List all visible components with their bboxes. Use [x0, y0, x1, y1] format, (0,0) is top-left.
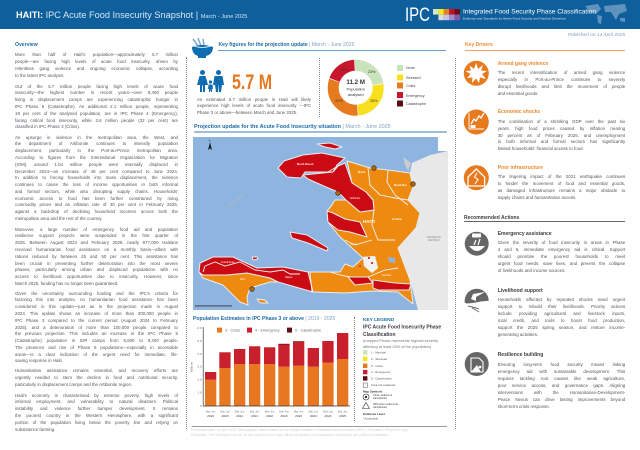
heading: key figures: Key figures for the projection update | March - June 2025	[218, 42, 354, 48]
map: Haiti IPC phase classification: Nord-Ouest	[297, 162, 314, 166]
bar chart: population in IPC Phase 3 or above: 3 - Crisis	[225, 329, 240, 333]
text block: overview: 2025), and a deterioration of more than 100,000 people compared to	[15, 324, 178, 330]
text block: overview: and formal sectors, while also disrupting supply chains. Households'	[15, 189, 178, 194]
bar chart: population in IPC Phase 3 or above: Mar Jun	[323, 410, 333, 414]
driver: poor infrastructure: as damaged infrastructure remains a major obstacle to	[498, 188, 625, 193]
published date: Published on 14 April 2025	[568, 33, 625, 38]
text block: overview: 19 per cent of the analysed population, are in IPC Phase 4 (Emergency),	[15, 111, 178, 116]
text block: overview: insecurity—the highest number in recent years—over 8,400 people	[15, 90, 178, 95]
action: resilience building: emergency aid with sustainable development. This	[498, 369, 625, 374]
text block: overview: relentless gang violence and ongoing economic collapse, according	[15, 66, 178, 71]
footer note	[191, 428, 408, 437]
text block: overview: IPC Phase 5 (Catastrophe). An additional 2.1 million people, representing	[15, 104, 178, 109]
text block: overview: phases, particularly among urban and displaced populations with no	[15, 267, 178, 272]
key legend panel: 3 - Crisis	[371, 364, 383, 368]
key legend panel: classification	[373, 406, 388, 409]
heading: recommended actions: Recommended Actions	[464, 215, 519, 221]
text block: overview: classified in IPC Phase 3 (Crisis).	[15, 124, 80, 129]
bar chart: population in IPC Phase 3 or above: 1.0	[197, 390, 202, 394]
action: livelihood support: include providing agricultural and livestock inputs,	[498, 311, 625, 316]
action: resilience building: poor service access, and governance gaps. Aligning	[498, 383, 625, 388]
action: resilience building: Resilience building	[498, 352, 543, 358]
text block: overview: portion of the population living below the poverty line and relying on	[15, 420, 178, 425]
map: Haiti IPC phase classification: Centre	[392, 217, 402, 221]
map: Haiti IPC phase classification: Grand'Anse	[221, 260, 235, 264]
text block: key figure description: experience high levels of acute food insecurity —IPC	[197, 103, 311, 108]
bar chart: population in IPC Phase 3 or above: 2023	[295, 414, 302, 418]
action: resilience building	[498, 352, 626, 409]
action: emergency assistance: 4 and 5, immediate emergency aid is critical. Support	[498, 247, 625, 252]
driver: armed gang violence: The recent intensification of armed gang violence	[498, 70, 625, 75]
action: livelihood support: support the 2025 spring season, and restore income-	[498, 325, 625, 330]
text block: overview: Haiti's economy is characterised by extreme poverty, high levels of	[15, 393, 178, 398]
action: resilience building: Peace Nexus can drive lasting improvements beyond	[498, 397, 625, 402]
text block: overview: been crucial in preventing further deterioration into the most severe	[15, 260, 178, 266]
bar chart: population in IPC Phase 3 or above: 2024	[325, 414, 332, 418]
text block: overview: resilience support projects were suspended in the first quarter of	[15, 233, 178, 238]
legend: donut phases: Crisis	[406, 84, 415, 88]
driver: economic shocks	[498, 109, 626, 151]
icon: family	[197, 70, 224, 92]
icon: bowl of grain	[192, 38, 213, 58]
IPC logo: Integrated Food Security Phase Classification	[463, 9, 596, 15]
text block: overview: received humanitarian food assistance on a monthly basis—albeit with	[15, 247, 178, 252]
key legend panel: IPC Acute Food Insecurity Phase	[363, 324, 441, 330]
action: emergency assistance: of livelihoods and income sources.	[498, 268, 566, 273]
text block: overview: (Catastrophe) population in IDP camps from 5,600 to 8,400 people.	[15, 338, 178, 343]
driver: armed gang violence: Armed gang violence	[498, 61, 548, 67]
legend: donut phases	[397, 65, 426, 106]
text block: overview: 2024. This update shows an increase of more than 300,000 people in	[15, 311, 178, 316]
bar chart: population in IPC Phase 3 or above: 0	[200, 404, 202, 408]
donut chart: population analysed: 23%	[368, 70, 376, 74]
action: resilience building: requires tackling root causes like weak agriculture,	[498, 376, 625, 381]
text block: overview: facing critical food insecurity, while 3.6 million people (32 per cent) are	[15, 118, 178, 122]
donut chart: population analysed: 11.2 M	[346, 79, 365, 86]
action: resilience building: short-term crisis response.	[498, 404, 550, 409]
icon: poor infrastructure	[464, 165, 489, 190]
key legend panel: 1 - Minimal	[371, 350, 386, 354]
text block: overview: people—are facing high levels of acute food insecurity, driven by	[15, 59, 178, 64]
heading: projection map: Projection update for the Acute Food Insecurity situation | March - June 2025	[194, 124, 391, 130]
footer note: Disclaimer: The information shown on this map does not imply official recognition or endorsement of physical and political boundaries.	[191, 433, 389, 437]
bar chart: population in IPC Phase 3 or above: 2025	[339, 414, 346, 418]
map: Haiti IPC phase classification: Ouest	[350, 242, 357, 246]
bar chart: population in IPC Phase 3 or above: Mar Jun	[279, 410, 289, 414]
bar chart: population in IPC Phase 3 or above: 4 - Emergency	[255, 329, 280, 333]
text block: overview: displacement, particularly in the Port-au-Prince metropolitan area.	[15, 148, 178, 153]
bar chart: population in IPC Phase 3 or above: Mar Jun	[309, 410, 319, 414]
bar chart: population in IPC Phase 3 or above: Mar Jun	[338, 410, 348, 414]
map: Haiti IPC phase classification: N	[209, 138, 211, 142]
text block: overview	[15, 52, 178, 432]
key legend panel: Area not analysed	[371, 383, 396, 387]
action: emergency assistance	[498, 231, 626, 273]
key legend panel: Map Symbols	[363, 390, 383, 394]
text block: overview: the department of Artibonite continues to intensify population	[15, 141, 178, 146]
map: Haiti IPC phase classification: REPUBLIC	[428, 239, 440, 242]
bar chart: population in IPC Phase 3 or above	[190, 326, 350, 418]
icon: livelihood support	[464, 288, 489, 312]
IPC logo: IPC	[405, 4, 430, 26]
text block: overview: to the latest IPC analysis.	[15, 73, 65, 78]
legend: donut phases: Catastrophe	[406, 102, 426, 106]
action: livelihood support: Households affected by repeated shocks need urgent	[498, 297, 625, 302]
text block: overview: According to figures from the International Organization for Migration	[15, 155, 178, 160]
donut chart: population analysed: analysed	[348, 92, 363, 97]
bar chart: population in IPC Phase 3 or above: Mar Jun	[220, 410, 230, 414]
key legend panel: Urban settlement	[373, 394, 392, 397]
text block: key figure description: An estimated 5.7 million people in Haiti will likely	[197, 97, 311, 102]
text block: overview: March 2025, funding has no longer been guaranteed.	[15, 281, 119, 286]
footer note: Publication date: 14 April 2025. Demographic data is based on the Haitian Institute of Statistics and Informatics (IHSI). | Feedback: IPC@FAO.org |	[191, 428, 408, 432]
text block: overview: More than half of Haiti's population—approximately 5.7 million	[15, 52, 178, 57]
driver: economic shocks: years, high food prices caused by inflation nearing	[498, 126, 625, 131]
driver: poor infrastructure: Poor infrastructure	[498, 165, 543, 171]
action: resilience building: interventions with the Humanitarian-Development-	[498, 390, 625, 395]
text block: overview: living in displacement camps are experiencing catastrophic hunger in	[15, 97, 178, 102]
map: Haiti IPC phase classification: Sud	[240, 277, 245, 281]
text block: overview: Given the uncertainty surrounding funding and the IPC's criteria for	[15, 291, 178, 296]
key legend panel: 4 - Emergency	[371, 370, 391, 374]
legend: donut phases: Emergency	[406, 94, 425, 98]
action: livelihood support: support to rebuild their livelihoods. Priority actions	[498, 304, 625, 309]
text block: overview: rations reduced by between 25 and 50 per cent. This assistance has	[15, 254, 178, 259]
action: emergency assistance: Given the severity of food insecurity in areas in Phase	[498, 240, 625, 245]
bar chart: population in IPC Phase 3 or above: Mar Jun	[206, 410, 216, 414]
action: livelihood support	[498, 288, 626, 337]
bar chart: population in IPC Phase 3 or above: 5.0	[197, 339, 202, 343]
bar chart: population in IPC Phase 3 or above: 2022	[266, 414, 273, 418]
text block: overview: IPC Phase 3 compared to the current period (August 2024 to February	[15, 318, 178, 323]
bar chart: population in IPC Phase 3 or above: 2023	[281, 414, 288, 418]
driver: poor infrastructure: The lingering impact of the 2021 earthquake continues	[498, 174, 625, 179]
text block: overview: The presence and rise of Phase 5 populations—especially in accessible	[15, 345, 178, 350]
text block: key figure description: Phase 3 or above—between March and June 2025.	[197, 110, 297, 115]
text block: overview: metropolitan area and the rest of the country.	[15, 216, 102, 221]
text block: overview: access to livelihood opportunities due to insecurity. However, since	[15, 274, 178, 279]
action: emergency assistance: should prioritise the poorest households to meet	[498, 254, 625, 259]
action: emergency assistance: urgent food needs, save lives, and prevent the collapse	[498, 261, 625, 266]
map: Haiti IPC phase classification	[193, 137, 448, 310]
text block: overview: continues to cause the loss of income opportunities in both informal	[15, 182, 178, 187]
bar chart: population in IPC Phase 3 or above: Mar Jun	[235, 410, 245, 414]
key legend panel: 2 - Stressed	[371, 357, 388, 361]
text block: overview: An upsurge in violence in the metropolitan area, the West, and	[15, 135, 178, 140]
bar chart: population in IPC Phase 3 or above: Mar Jun	[294, 410, 304, 414]
key legend panel: classification	[373, 397, 388, 400]
key legend panel	[362, 317, 441, 421]
text block: overview: considered in this update—just as in the projection made in August	[15, 304, 178, 309]
text block: key figure description	[197, 97, 311, 115]
key legend panel: affecting at least 20% of the population)	[363, 344, 432, 349]
text block: overview: particularly in displacement camps and the Artibonite region.	[15, 382, 132, 387]
action: livelihood support: rural credit, and tools to boost food production,	[498, 318, 625, 323]
text block: overview: In addition to forcing households into mass displacement, the violence	[15, 175, 178, 180]
text block: overview: against a backdrop of declining household incomes across both the	[15, 209, 178, 214]
key legend panel: KEY LEGEND	[363, 317, 395, 323]
key legend panel: 5 - Catastrophe	[371, 376, 392, 380]
IPC logo: Evidence and Standards for Better Food Security and Nutrition Decisions	[463, 16, 567, 20]
driver: poor infrastructure: supply chains and humanitarian access.	[498, 195, 576, 200]
map: Haiti IPC phase classification: Nord	[358, 170, 365, 174]
text block: overview: factoring this into analysis, no humanitarian food assistance has been	[15, 297, 178, 302]
driver: armed gang violence	[498, 61, 626, 96]
driver: economic shocks: 30 percent as of February 2025, and unemployment	[498, 132, 625, 138]
bar chart: population in IPC Phase 3 or above: 2021	[251, 414, 258, 418]
driver: armed gang violence: and essential goods.	[498, 91, 538, 96]
map: Haiti IPC phase classification: Artibonite	[350, 197, 361, 200]
map: Haiti IPC phase classification: HAITI	[363, 219, 375, 224]
driver: economic shocks: Economic shocks	[498, 109, 540, 115]
text block: overview: areas—is a clear indication of the urgent need for immediate, life-	[15, 352, 178, 357]
driver: poor infrastructure: to hinder the movement of food and essential goods,	[498, 181, 625, 186]
text block: overview: commodity prices and an inflation rate of 30 per cent in February 2025,	[15, 202, 178, 207]
text block: overview: informal employment, and vulnerability to natural disasters. Political	[15, 399, 178, 404]
donut chart: population analysed: 32%	[335, 99, 343, 103]
icon: emergency assistance	[464, 232, 489, 256]
key legend panel: * Acceptable	[363, 417, 378, 421]
text block: overview: urgently needed to stem the decline in food and nutritional security,	[15, 375, 178, 380]
key figure: 5.7 M: 5.7 M	[232, 71, 272, 94]
icon: economic shocks	[464, 110, 489, 134]
bar chart: population in IPC Phase 3 or above: 2.0	[197, 378, 202, 382]
driver: armed gang violence: especially in Port-au-Prince continues to severely	[498, 77, 625, 82]
text block: overview: economic access to food has been further constrained by rising	[15, 196, 178, 201]
text block: overview: December 2024—an increase of 48 per cent compared to June 2024.	[15, 168, 178, 174]
driver: armed gang violence: disrupt livelihoods and limit the movement of people	[498, 84, 625, 89]
donut chart: population analysed	[328, 60, 384, 116]
map: Haiti IPC phase classification: Sud-Est	[382, 273, 392, 277]
map: Haiti IPC phase classification: DOMINICAN	[427, 236, 441, 239]
bar chart: population in IPC Phase 3 or above: 2024	[310, 414, 317, 418]
heading: population estimates: Population Estimates in IPC Phase 3 or above | 2019 - 2025	[193, 316, 335, 322]
driver: economic shocks: The combination of a shrinking GDP over the past six	[498, 119, 625, 124]
action: emergency assistance: Emergency assistance	[498, 231, 552, 237]
bar chart: population in IPC Phase 3 or above: Millions	[190, 362, 194, 372]
driver: economic shocks: in both informal and formal sectors has significantly	[498, 139, 625, 144]
text block: overview: saving response in Haiti.	[15, 358, 63, 363]
text block: overview: Humanitarian assistance remains essential, and recovery efforts are	[15, 368, 178, 373]
text block: overview: Moreover, a large number of emergency food aid and population	[15, 227, 178, 232]
bar chart: population in IPC Phase 3 or above: 4.0	[197, 352, 202, 356]
key legend panel: Evidence Level	[363, 412, 385, 416]
donut chart: population analysed: Population	[347, 86, 365, 92]
bar chart: population in IPC Phase 3 or above: Mar Jun	[265, 410, 275, 414]
key legend panel: Classification	[363, 332, 396, 338]
legend: donut phases: None	[406, 66, 415, 70]
text block: overview: Out of the 5.7 million people facing high levels of acute food	[15, 84, 178, 89]
heading: overview: Overview	[15, 42, 38, 48]
bar chart: population in IPC Phase 3 or above: 3.0	[197, 364, 202, 368]
driver: economic shocks: limited households' financial access to food.	[498, 146, 584, 151]
key legend panel: (mapped Phase represents highest severity	[363, 338, 438, 343]
text block: overview: (IOM), around 1.04 million people were internally displaced in	[15, 162, 178, 167]
bar chart: population in IPC Phase 3 or above: 5 - Catastrophe	[295, 329, 321, 333]
action: resilience building: Ensuring long-term food security means linking	[498, 362, 625, 367]
icon: resilience building	[464, 352, 489, 376]
title: HAITI: IPC Acute Food Insecurity Snapshot | March - June 2025	[16, 10, 247, 20]
text block: overview: the previous projection. This includes an increase in the IPC Phase 5	[15, 331, 178, 336]
IPC logo	[405, 4, 627, 26]
bar chart: population in IPC Phase 3 or above: Mar Jun	[250, 410, 260, 414]
key legend panel: IDPs/other settlements	[373, 403, 399, 406]
donut chart: population analysed: 19%	[340, 68, 348, 72]
map: Haiti IPC phase classification: Nippes	[285, 276, 293, 279]
donut chart: population analysed: 26%	[370, 99, 378, 103]
text block: overview: instability and violence further hamper development. It remains	[15, 406, 178, 411]
text block: overview: the poorest country in the Western Hemisphere, with a significant	[15, 413, 178, 418]
header band	[0, 0, 640, 29]
bar chart: population in IPC Phase 3 or above: 2021	[236, 414, 243, 418]
bar chart: population in IPC Phase 3 or above: 2019	[207, 414, 214, 418]
heading: key drivers: Key Drivers	[465, 42, 493, 48]
driver: poor infrastructure	[498, 165, 626, 200]
text block: overview: 2025. Between August 2024 and February 2025, nearly 977,000 Haitians	[15, 240, 178, 245]
action: livelihood support: generating activities.	[498, 332, 538, 337]
map: Haiti IPC phase classification: Nord-Est	[394, 183, 407, 187]
legend: donut phases: Stressed	[406, 76, 421, 80]
text block: overview: subsistence farming.	[15, 426, 55, 432]
bar chart: population in IPC Phase 3 or above: 6.0	[197, 326, 202, 330]
icon: armed gang violence	[464, 60, 489, 86]
bar chart: population in IPC Phase 3 or above: 2020	[222, 414, 229, 418]
action: livelihood support: Livelihood support	[498, 288, 543, 294]
